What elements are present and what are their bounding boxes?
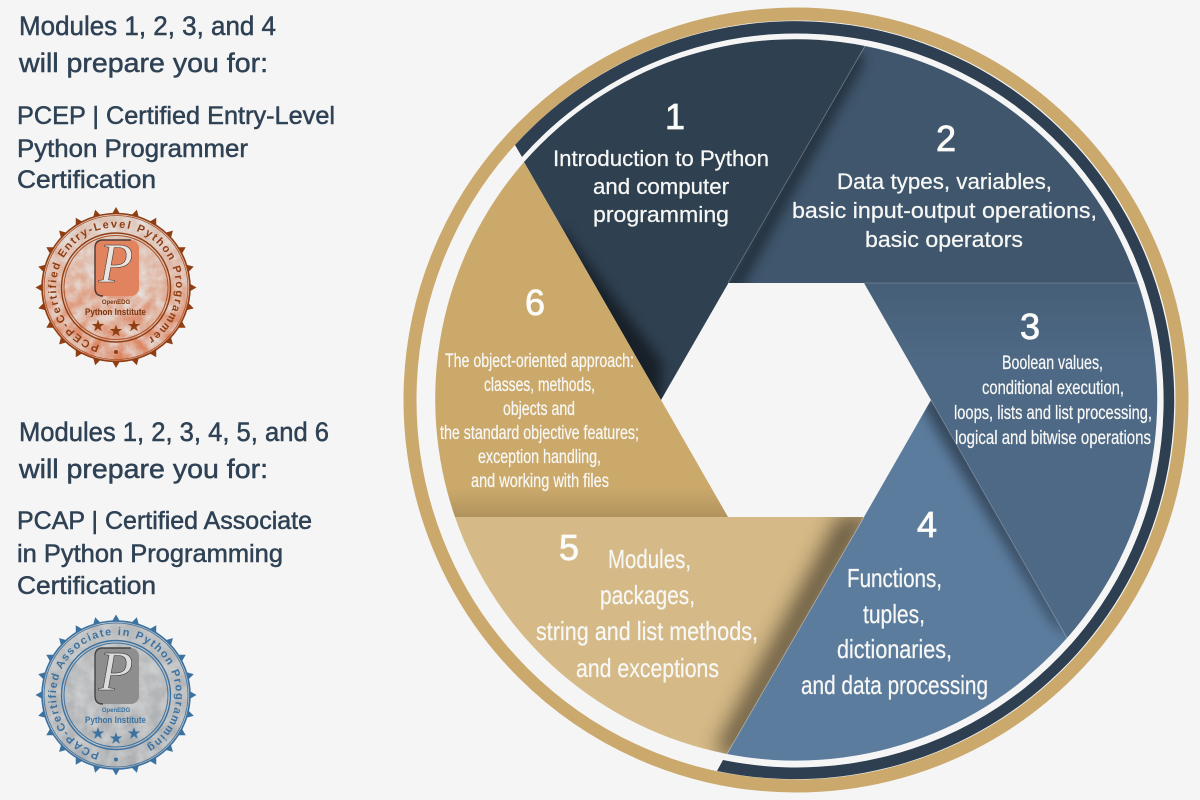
- heading: modules 1 to 6: will prepare you for:: [18, 454, 268, 484]
- icon: PCEP badge: OpenEDG: [102, 300, 130, 306]
- icon: PCAP badge: Python Institute: [85, 715, 146, 726]
- icon: PCEP badge: PCEP-Certified Entry-Level Python Programmer: [48, 220, 182, 352]
- segment 6: [435, 162, 740, 517]
- heading: modules 1 to 4: will prepare you for:: [18, 48, 268, 78]
- segment 6: objects and: [503, 399, 575, 420]
- segment 6: 6: [525, 282, 545, 323]
- icon: PCAP badge: P: [98, 641, 133, 703]
- outer gold ring: [410, 14, 1182, 786]
- text: PCEP certification: Certification: [17, 166, 156, 194]
- segment 6: classes, methods,: [484, 375, 595, 396]
- segment 5: packages,: [600, 580, 695, 610]
- segment 4: dictionaries,: [837, 634, 952, 664]
- icon: PCAP badge: OpenEDG: [102, 708, 130, 714]
- text: PCAP certification: [17, 507, 312, 600]
- segment 2: basic input-output operations,: [792, 198, 1097, 223]
- segment 3: logical and bitwise operations: [955, 428, 1151, 449]
- segment 5: Modules,: [608, 544, 691, 574]
- text: PCEP certification: Python Programmer: [17, 135, 248, 163]
- segment 5: string and list methods,: [536, 616, 758, 646]
- segment 4: [727, 395, 1072, 761]
- segment 6: exception handling,: [478, 447, 601, 468]
- segment 2: Data types, variables,: [837, 169, 1052, 194]
- segment 4: Functions,: [847, 563, 942, 593]
- segment 1: Introduction to Python: [553, 146, 769, 171]
- heading: modules 1 to 6: [18, 417, 329, 484]
- navy arc ring: [515, 21, 1174, 779]
- segment 4: and data processing: [801, 670, 988, 700]
- text: PCAP certification: Certification: [17, 572, 156, 600]
- text: PCEP certification: PCEP | Certified Entry-Level: [17, 102, 335, 130]
- text: PCAP certification: PCAP | Certified Associate: [17, 507, 312, 535]
- segment 3: 3: [1020, 306, 1040, 347]
- segment 2: basic operators: [865, 227, 1023, 252]
- segment 5: and exceptions: [576, 653, 719, 683]
- icon: PCEP badge: P: [98, 233, 133, 295]
- segment 1: and computer: [593, 174, 729, 199]
- segment 6: and working with files: [471, 471, 609, 492]
- segment 3: [864, 283, 1157, 638]
- segment 3: conditional execution,: [982, 378, 1124, 399]
- segment 2: [722, 46, 1138, 292]
- text: PCEP certification: [17, 102, 335, 194]
- text: PCAP certification: in Python Programming: [17, 540, 283, 568]
- segment 5: [455, 510, 875, 762]
- segment 6: the standard objective features;: [440, 423, 639, 444]
- segment 6: The object-oriented approach:: [445, 351, 634, 372]
- segment 4: tuples,: [863, 599, 925, 629]
- icon: PCEP badge: Python Institute: [85, 307, 146, 318]
- segment 5: 5: [559, 527, 579, 568]
- heading: modules 1 to 6: Modules 1, 2, 3, 4, 5, and 6: [19, 417, 329, 447]
- icon: PCAP badge: PCAP-Certified Associate in Python Programming: [48, 627, 182, 760]
- heading: modules 1 to 4: Modules 1, 2, 3, and 4: [19, 11, 276, 41]
- segment 3: Boolean values,: [1002, 353, 1103, 374]
- heading: modules 1 to 4: [18, 11, 276, 78]
- segment 1: 1: [665, 96, 685, 137]
- segment 1: programming: [593, 202, 729, 227]
- segment 1: [524, 39, 865, 412]
- segment 2: 2: [936, 118, 956, 159]
- segment 4: 4: [917, 504, 937, 545]
